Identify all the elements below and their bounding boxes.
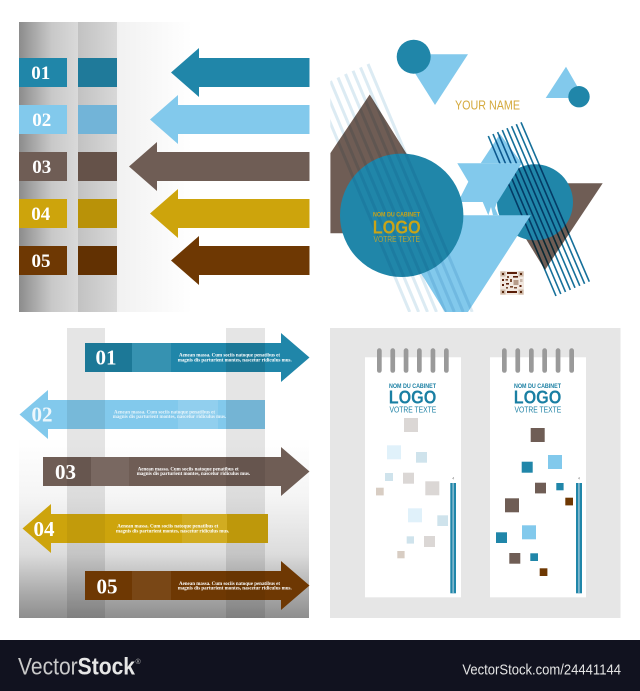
arrow 04: magnis dis parturient montes, nascetur ridiculus mus.	[116, 529, 230, 535]
image id: VectorStock.com/24441144	[462, 662, 621, 678]
arrow 01: Aenean massa. Cum sociis natoque penatibus et	[179, 353, 280, 359]
notepad: coloured squares	[490, 348, 586, 597]
row 05: 05	[32, 251, 50, 272]
pale squares	[376, 418, 448, 558]
row 01	[19, 48, 310, 97]
arrow 03: magnis dis parturient montes, nascetur ridiculus mus.	[137, 471, 251, 477]
icon: QR code	[500, 271, 524, 295]
side bar	[576, 476, 582, 593]
footer bar	[0, 640, 640, 691]
arrow 02: Aenean massa. Cum sociis natoque penatibus et	[114, 409, 215, 415]
arrow 05: 05	[96, 575, 118, 599]
row 01: 01	[31, 63, 50, 84]
large down triangle	[421, 215, 531, 312]
grey backdrop	[330, 328, 620, 618]
coloured squares	[496, 428, 573, 576]
arrow 01	[85, 333, 310, 382]
logo text: VOTRE TEXTE	[514, 405, 561, 414]
logo text on circle: LOGO	[373, 216, 421, 237]
side bar: 4	[578, 476, 580, 480]
registered mark: ®	[136, 658, 142, 666]
row 05	[19, 236, 310, 285]
row 04	[19, 189, 310, 238]
arrow 05: magnis dis parturient montes, nascetur ridiculus mus.	[178, 586, 292, 592]
logo text	[389, 383, 436, 414]
arrow 02	[20, 390, 265, 439]
arrow 03: Aenean massa. Cum sociis natoque penatibus et	[138, 466, 239, 472]
arrow 05	[85, 561, 310, 610]
logo text: LOGO	[389, 387, 436, 407]
arrow 04: Aenean massa. Cum sociis natoque penatibus et	[117, 524, 218, 530]
spiral rings	[377, 348, 449, 373]
panel: notepad mockups	[330, 328, 620, 618]
gradient background	[19, 328, 309, 618]
logo text: LOGO	[514, 387, 561, 407]
spiral rings	[502, 348, 574, 373]
top triangle and circle	[397, 40, 468, 105]
panel: horizontal arrows banner	[19, 328, 310, 618]
grey column backdrop	[19, 22, 192, 312]
row 04: 04	[31, 204, 51, 225]
arrow 03: 03	[55, 460, 76, 484]
side bar	[450, 476, 456, 593]
small triangle and circle	[546, 67, 590, 107]
panel: numbered list with left arrows	[19, 22, 310, 312]
notepad: faded squares	[365, 348, 461, 597]
large brown triangle	[330, 94, 407, 234]
arrow 05: Aenean massa. Cum sociis natoque penatibus et	[179, 581, 280, 587]
right shapes with dark stripes	[481, 122, 603, 296]
heading: your name: YOUR NAME	[455, 98, 520, 112]
row 03	[19, 142, 310, 191]
logo text on circle: VOTRE TEXTE	[374, 235, 420, 244]
arrow 01: magnis dis parturient montes, nascetur ridiculus mus.	[178, 357, 292, 363]
arrow 03	[43, 447, 310, 496]
arrow 01: 01	[96, 346, 116, 370]
arrow 04: 04	[34, 517, 55, 541]
arrow 02: 02	[32, 403, 52, 427]
logo text	[514, 383, 561, 414]
large circle	[340, 154, 463, 277]
vertical grey bands	[67, 328, 265, 618]
pale diagonal stripes	[316, 64, 472, 312]
star	[457, 163, 522, 215]
logo text on circle: NOM DU CABINET	[373, 212, 420, 218]
logo text: NOM DU CABINET	[514, 383, 561, 390]
side bar: 4	[452, 476, 454, 480]
row 02: 02	[32, 110, 51, 131]
arrow 04	[22, 504, 268, 553]
logo text: VOTRE TEXTE	[390, 405, 436, 414]
row 02	[19, 95, 310, 144]
arrow 02: magnis dis parturient montes, nascetur ridiculus mus.	[113, 414, 227, 420]
logo text: NOM DU CABINET	[389, 383, 436, 390]
panel: geometric business card	[316, 40, 603, 312]
VectorStock logo: VectorStock	[18, 654, 136, 680]
row 03: 03	[32, 157, 51, 178]
logo text on circle	[373, 212, 421, 244]
